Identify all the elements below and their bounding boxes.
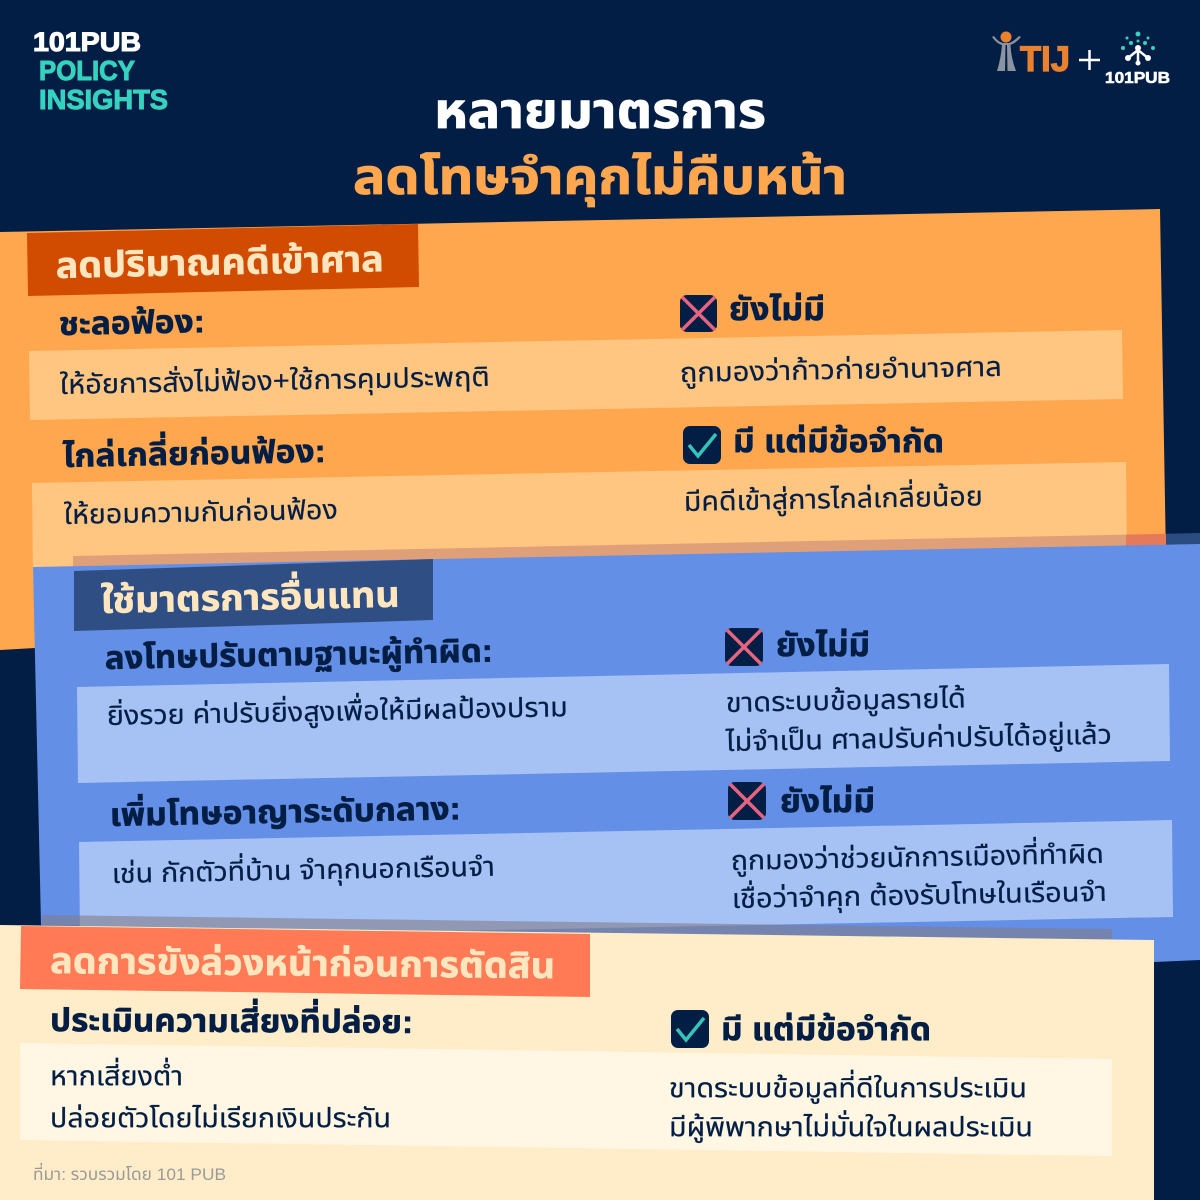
panel: use alternative measures (33, 533, 1200, 962)
panel: reduce pre-trial detention (0, 925, 1154, 1200)
detail row: risk assessment: หากเสี่ยงต่ำ (50, 1057, 183, 1091)
title (353, 83, 847, 207)
heading tag: reduce cases: ลดปริมาณคดีเข้าศาล (55, 238, 384, 286)
heading tag: reduce cases (27, 224, 419, 296)
logo: TIJ + 101PUB: 101PUB (1105, 70, 1170, 87)
panel: reduce cases entering court (0, 209, 1166, 650)
heading tag: alternatives (74, 559, 433, 631)
row heading: risk assessment: ประเมินความเสี่ยงที่ปล่อย: (50, 997, 413, 1040)
title: ลดโทษจำคุกไม่คืบหน้า (353, 149, 847, 207)
status: not yet: ยังไม่มี (776, 627, 870, 663)
status: yes but limited: มี แต่มีข้อจำกัด (733, 423, 944, 459)
detail row: deferred prosecution (29, 330, 1123, 420)
status: not yet (680, 291, 825, 332)
logo: TIJ + 101PUB (992, 32, 1170, 87)
row heading: pre-charge mediation: ไกล่เกลี่ยก่อนฟ้อง: (62, 428, 326, 474)
detail row: deferred prosecution: ให้อัยการสั่งไม่ฟ้อง+ใช้การคุมประพฤติ (59, 359, 490, 401)
row heading: intermediate punishment: เพิ่มโทษอาญาระดับกลาง: (109, 787, 461, 833)
logo: 101PUB Policy Insights: 101PUB (33, 27, 141, 57)
detail row: income-based fines: ขาดระบบข้อมูลรายได้ (726, 683, 966, 719)
detail row: deferred prosecution: ถูกมองว่าก้าวก่ายอำนาจศาล (680, 352, 1002, 389)
detail row: income-based fines (77, 664, 1170, 783)
detail row: intermediate punishment: เชื่อว่าจำคุก ต้องรับโทษในเรือนจำ (731, 873, 1107, 915)
detail row: pre-charge mediation (32, 462, 1127, 580)
status: not yet (725, 627, 870, 666)
logo: 101PUB Policy Insights (33, 27, 168, 115)
title: หลายมาตรการ (434, 83, 766, 139)
status: not yet: ยังไม่มี (780, 783, 875, 819)
logo: 101PUB Policy Insights: INSIGHTS (39, 84, 168, 115)
detail row: intermediate punishment: เช่น กักตัวที่บ้าน จำคุกนอกเรือนจำ (111, 848, 495, 890)
status: yes but limited: มี แต่มีข้อจำกัด (721, 1011, 931, 1047)
detail row: risk assessment: มีผู้พิพากษาไม่มั่นใจในผลประเมิน (669, 1110, 1033, 1143)
detail row: income-based fines: ไม่จำเป็น ศาลปรับค่าปรับได้อยู่แล้ว (724, 720, 1112, 758)
detail row: risk assessment: ปล่อยตัวโดยไม่เรียกเงินประกัน (50, 1103, 391, 1133)
detail row: intermediate punishment (42, 820, 1173, 945)
heading tag: pre-trial detention (20, 926, 590, 997)
logo: 101PUB Policy Insights: POLICY (39, 55, 135, 86)
status: not yet: ยังไม่มี (729, 291, 825, 327)
detail row: intermediate punishment: ถูกมองว่าช่วยนักการเมืองที่ทำผิด (730, 835, 1104, 877)
row heading: deferred prosecution: ชะลอฟ้อง: (58, 303, 205, 342)
status: yes but limited (683, 423, 944, 464)
detail row: income-based fines: ยิ่งรวย ค่าปรับยิ่งสูงเพื่อให้มีผลป้องปราม (106, 688, 568, 732)
detail row: pre-charge mediation: ให้ยอมความกันก่อนฟ้อง (64, 495, 338, 530)
heading tag: alternatives: ใช้มาตรการอื่นแทน (100, 569, 400, 621)
detail row: risk assessment: ขาดระบบข้อมูลที่ดีในการประเมิน (669, 1069, 1027, 1104)
status: not yet (728, 782, 875, 820)
row heading: income-based fines: ลงโทษปรับตามฐานะผู้ทำผิด: (104, 633, 493, 677)
detail row: pre-charge mediation: มีคดีเข้าสู่การไกล่เกลี่ยน้อย (683, 477, 983, 518)
detail row: risk assessment (20, 1043, 1112, 1156)
heading tag: pre-trial detention: ลดการขังล่วงหน้าก่อนการตัดสิน (50, 940, 555, 986)
source note: ที่มา: รวบรวมโดย 101 PUB (33, 1162, 226, 1184)
logo: TIJ + 101PUB: TIJ (1020, 40, 1070, 79)
